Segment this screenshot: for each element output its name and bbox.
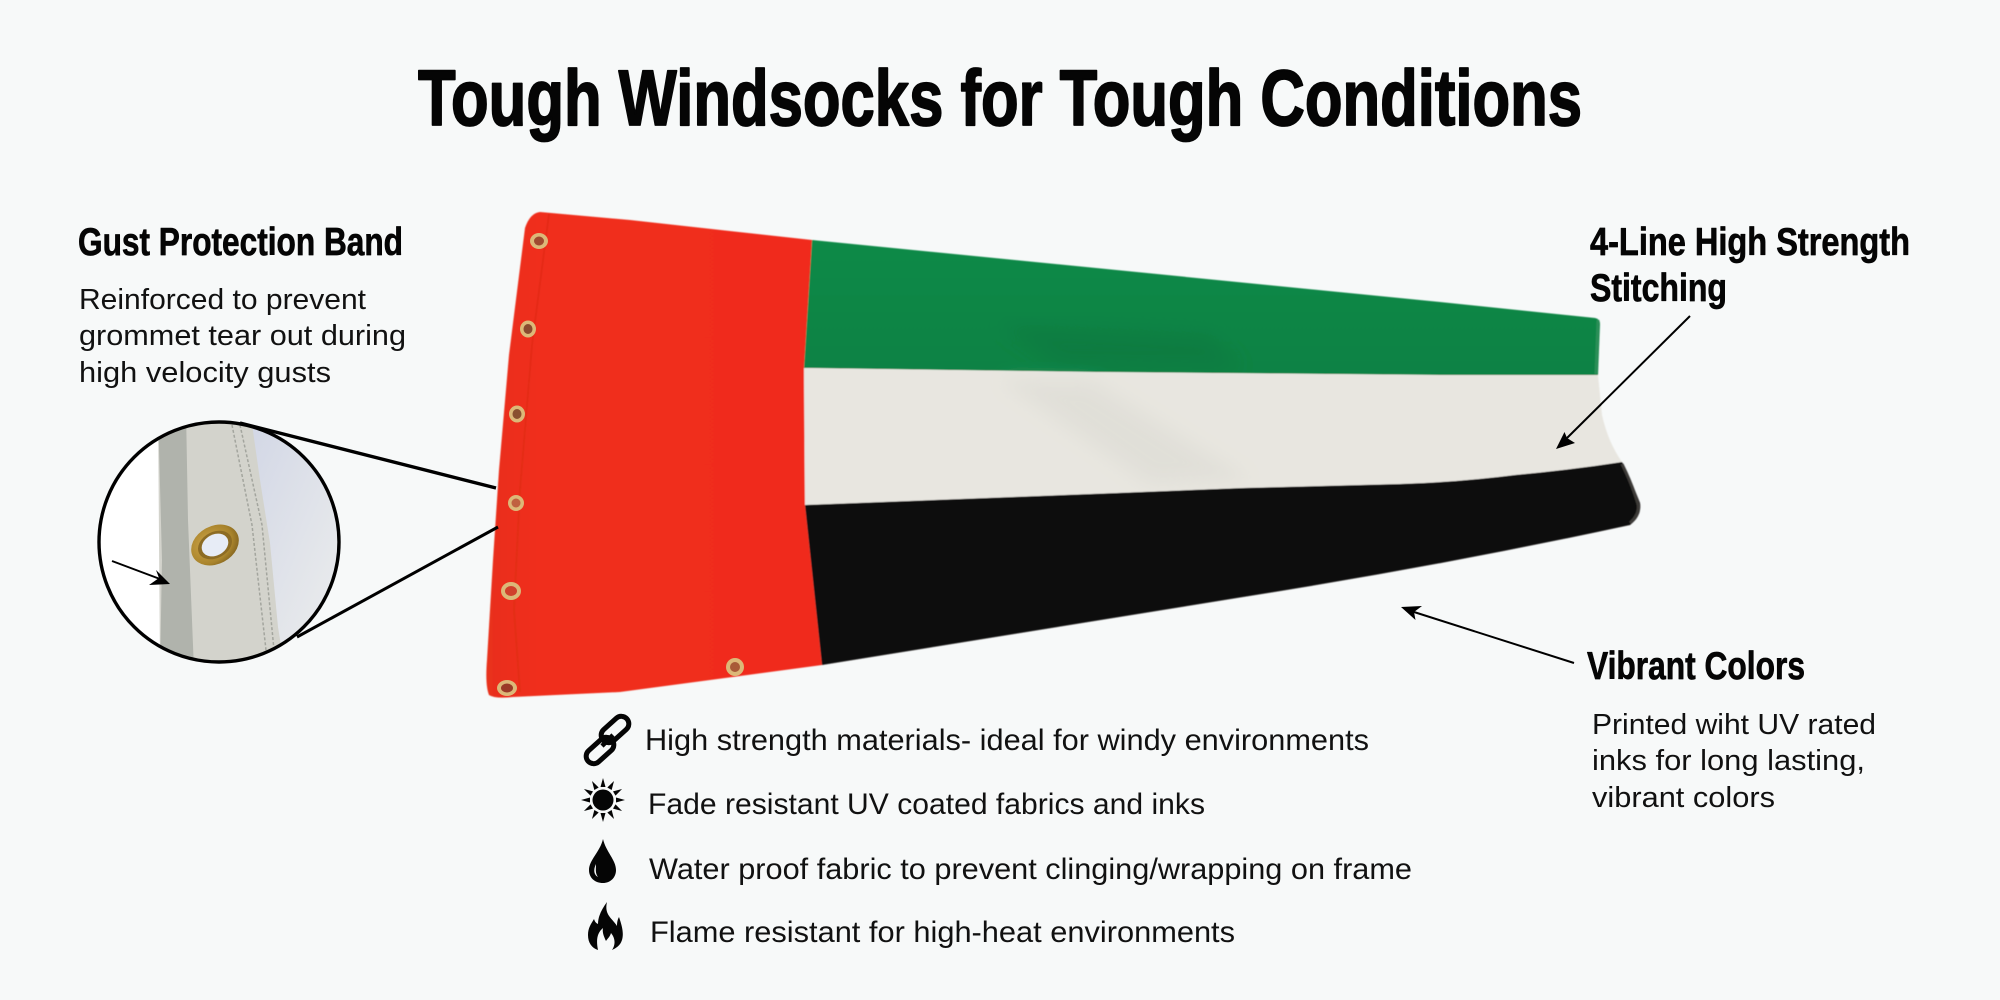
callout: vibrant colors: inks for long lasting,: [1592, 745, 1865, 777]
callout: vibrant colors: [1587, 645, 1876, 814]
icon: flame: [588, 902, 623, 950]
callout: vibrant colors: Vibrant Colors: [1587, 645, 1805, 688]
callout: stitching: [1590, 221, 1910, 310]
icon: water drop: [589, 839, 616, 883]
zoom circle: grommet detail: [99, 410, 350, 670]
feature: fade resistant: Fade resistant UV coated fabrics and inks: [648, 788, 1205, 821]
callout: vibrant colors: vibrant colors: [1592, 782, 1775, 814]
zoom connector lines: [240, 423, 498, 637]
green fold shading: [1000, 325, 1240, 368]
callout: vibrant colors: Printed wiht UV rated: [1592, 709, 1876, 741]
callout: stitching: 4-Line High Strength: [1590, 221, 1910, 264]
callout: gust protection band: high velocity gusts: [79, 357, 331, 389]
arrow: stitching: [1556, 316, 1690, 449]
grommets: [497, 233, 744, 696]
feature: flame resistant: Flame resistant for high-heat environments: [650, 916, 1235, 949]
white stripe: [804, 368, 1622, 505]
black stripe: [805, 462, 1640, 665]
callout: stitching: Stitching: [1590, 267, 1727, 310]
brass grommet: [191, 524, 239, 566]
small arrow: [112, 561, 170, 585]
callout: gust protection band: Gust Protection Band: [78, 221, 403, 264]
callout: gust protection band: [78, 221, 406, 389]
white fold shading: [1000, 380, 1250, 485]
red gust protection band: [486, 212, 822, 698]
green hem: [1596, 320, 1598, 374]
feature: water proof: Water proof fabric to prevent clinging/wrapping on frame: [649, 853, 1412, 886]
feature list: [581, 713, 1412, 950]
icon: chain link: [583, 713, 632, 767]
green stripe: [804, 240, 1600, 375]
arrow: vibrant colors: [1401, 606, 1574, 663]
windsock illustration: [486, 212, 1640, 698]
title: Tough Windsocks for Tough Conditions: [418, 53, 1582, 142]
feature: high strength: High strength materials- ideal for windy environments: [645, 724, 1369, 757]
black hem: [1622, 464, 1638, 523]
red band stitching: [514, 214, 549, 692]
icon: sun: [581, 778, 625, 822]
callout: gust protection band: Reinforced to prevent: [79, 284, 366, 316]
callout: gust protection band: grommet tear out during: [79, 320, 406, 352]
